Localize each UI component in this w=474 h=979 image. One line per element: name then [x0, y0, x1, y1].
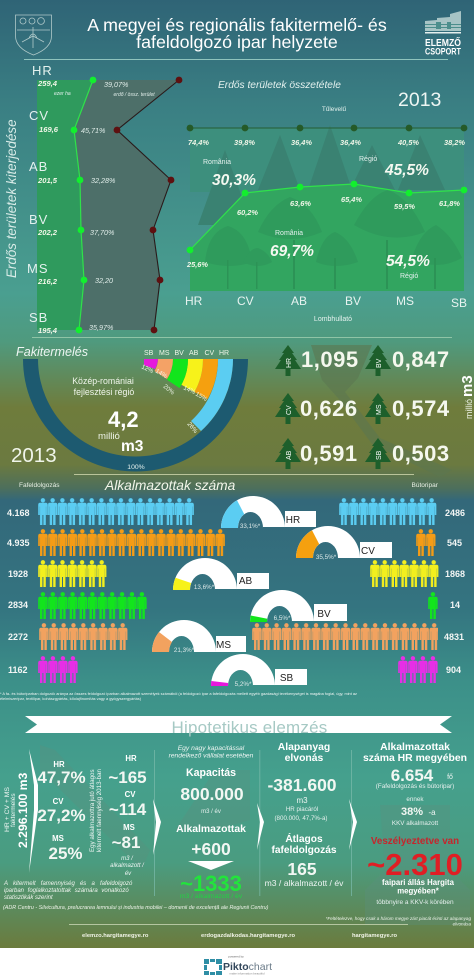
gauge: BV: BV [317, 609, 331, 620]
label: deciduous: Lombhullató [314, 316, 352, 323]
chart: forest area by county: 39,07% [104, 80, 129, 89]
gauge: AB: AB [239, 576, 252, 587]
column: raw material withdrawal: m3 / alkalmazott / év [265, 878, 344, 888]
chart: forest composition: 40,5% [397, 138, 419, 147]
chart: forest composition: 61,8% [439, 199, 460, 208]
chart: wood production semi-donut: 14% [182, 384, 197, 396]
text: central development region: Közép-romániai [72, 376, 134, 386]
pictogram row: BV: 2834 [8, 600, 28, 610]
logo: Elemző Csoport [425, 11, 462, 56]
per-employee values: MS [123, 823, 135, 832]
chart: wood production semi-donut: SB [144, 350, 154, 357]
rotated caption: Egy alkalmazottra jutó átlagos [89, 769, 96, 852]
column: large company capacity: Egy nagy kapacitással [178, 745, 245, 752]
chart: forest area by county: SB [29, 310, 48, 325]
chart: wood production semi-donut: HR [219, 350, 229, 357]
gauge: HR [221, 496, 316, 530]
column: employees in Harghita: fő [447, 774, 453, 781]
column headers: Fafeldolgozás [19, 482, 60, 489]
pictogram row: MS: 4831 [444, 632, 464, 642]
chart: forest area by county: ezer ha [54, 91, 71, 97]
banner: hypothetical analysis [25, 716, 452, 737]
pictogram row: HR [7, 498, 465, 525]
county production figures: 0,847 [392, 347, 450, 372]
value: 4.2 million m3: m3 [121, 438, 144, 455]
pictogram row: CV: 4.935 [7, 538, 30, 548]
chart: forest area by county: BV [29, 212, 48, 227]
county production figures: SB [376, 450, 383, 460]
chart: forest composition: Régió [359, 156, 377, 163]
pictogram row: MS [8, 623, 464, 650]
county production figures: AB [286, 450, 293, 460]
chart: forest composition [185, 125, 467, 310]
chart: wood production semi-donut: MS [159, 350, 170, 357]
column: employees in Harghita: 6.654 [391, 766, 434, 785]
arrow chevrons [153, 799, 357, 855]
chart: forest composition: BV [345, 294, 361, 308]
per-employee values: alkalmazott / [110, 863, 145, 869]
chart: forest area by county: 216,2 [37, 277, 58, 286]
vertical dividers [154, 750, 352, 896]
chart: forest composition: 65,4% [341, 195, 362, 204]
chart: wood production semi-donut: BV [174, 350, 184, 357]
shares by county: HR [53, 760, 65, 769]
asterisk note [326, 916, 471, 926]
chart: wood production semi-donut: 20% [162, 383, 176, 397]
per-employee values: m3 / [121, 856, 134, 862]
pictogram row: SB: 1162 [8, 665, 28, 675]
heading: forest composition: Erdős területek összetétele [218, 80, 341, 91]
chart: forest area by county: 45,71% [81, 126, 106, 135]
column: raw material withdrawal: (800.000, 47,7%-a) [275, 815, 327, 822]
rotated total: HR + CV + MS [4, 787, 11, 832]
shares by county: 27,2% [37, 806, 86, 825]
pictogram row: MS: 2272 [8, 632, 28, 642]
footnote: élelmiszeripar, textilipar, kohászgyártás, kőolajfinomítás vagy a gyógyszergyártás) [0, 696, 142, 701]
column: raw material withdrawal: elvonás [285, 753, 324, 764]
icon: county coat of arms [16, 15, 52, 55]
column: employees in Harghita: KKV alkalmazott [392, 820, 438, 827]
chart: forest area by county [27, 63, 182, 335]
chart: forest composition: 36,4% [340, 138, 361, 147]
chart: wood production semi-donut: CV [204, 350, 215, 357]
chart: forest composition: 59,5% [394, 202, 415, 211]
divider [24, 59, 448, 60]
chart: forest composition: 63,6% [290, 199, 311, 208]
chart: forest composition: 54,5% [386, 253, 430, 270]
text: central development region [72, 376, 134, 397]
chart: forest area by county: 35,97% [89, 323, 114, 332]
column: employees in Harghita: többnyire a KKV-k körében [376, 899, 454, 906]
asterisk note: *Feltételezve, hogy csak a három megye zárt piacát érinti az alapanyag [326, 916, 471, 921]
Piktochart logo: powered by [228, 954, 244, 958]
chart: wood production semi-donut: AB [189, 350, 199, 357]
website links [82, 933, 398, 939]
website links: elemzo.hargitamegye.ro [82, 933, 149, 939]
chart: forest composition: 74,4% [188, 138, 209, 147]
chart: forest composition: MS [396, 294, 414, 308]
gauge: BV [250, 590, 347, 622]
column: large company capacity: +600 [191, 839, 231, 859]
chart: forest area by county: 195,4 [38, 326, 58, 335]
chart: forest composition: România [203, 159, 231, 166]
column: employees in Harghita: (Fafeldolgozás és bútoripar) [376, 783, 454, 790]
gauge: CV: CV [361, 546, 375, 557]
per-employee values [108, 754, 147, 877]
column: raw material withdrawal: 165 [287, 859, 317, 879]
year 2013: 2013 [11, 444, 57, 467]
shares by county [37, 760, 86, 863]
pictogram row: AB [8, 560, 465, 587]
column: employees in Harghita: száma HR megyében [363, 753, 467, 764]
gauge: HR: HR [286, 515, 300, 526]
chart: wood production semi-donut: 100% [127, 464, 145, 471]
gauge: MS: MS [216, 640, 231, 651]
column: employees in Harghita: faipari állás Hargita [382, 878, 455, 887]
Piktochart logo: Piktochart [223, 961, 272, 973]
gauge: HR: 33,1%* [240, 523, 261, 530]
gauge: SB [211, 654, 307, 688]
pictogram row: CV: 545 [447, 538, 462, 548]
chart: forest composition: 60,2% [237, 208, 258, 217]
chart: forest composition: SB [451, 296, 467, 310]
label: coniferous: Tűlevelű [322, 106, 347, 113]
column: large company capacity: Kapacitás [186, 767, 236, 779]
statistics note: statisztikák szerint [4, 895, 53, 901]
column: employees in Harghita: ennek [406, 796, 424, 803]
title: A megyei és regionális fakitermelő- és [87, 15, 387, 35]
shares by county: MS [52, 834, 64, 843]
per-employee values: év [125, 871, 132, 877]
county production figures: 0,574 [392, 396, 450, 421]
pictogram row: HR: 4.168 [7, 508, 30, 518]
logo: Elemző Csoport: CSOPORT [425, 46, 462, 56]
gauge: CV [296, 526, 392, 561]
county production figures: 0,591 [300, 441, 358, 466]
shares by county: 25% [48, 844, 83, 863]
column: large company capacity [169, 745, 254, 900]
chart: forest area by county: 32,20 [95, 276, 113, 285]
column: raw material withdrawal [265, 742, 344, 888]
rotated total: faktermelés [10, 793, 17, 827]
per-employee values: CV [125, 790, 136, 799]
footnote [0, 691, 357, 701]
chart: forest area by county: 259,4 [37, 79, 58, 88]
gauge: SB: SB [280, 673, 293, 684]
per-employee values: ~114 [109, 800, 147, 819]
rotated total: 2.296.100 m3 [16, 773, 30, 848]
county production figures: 1,095 [301, 347, 359, 372]
column: raw material withdrawal: m3 [296, 796, 308, 805]
faint illustration behind numbers [311, 345, 452, 477]
gauge: BV: 6,5%* [274, 615, 291, 622]
column: employees in Harghita [363, 742, 467, 906]
Piktochart logo: make information beautiful [229, 972, 265, 976]
pictogram row: CV [7, 529, 462, 556]
chart: forest area by county: MS [27, 261, 48, 276]
chart: forest area by county: 201,5 [37, 176, 58, 185]
value: 4.2 million m3 [98, 407, 144, 455]
divider [32, 337, 452, 338]
footnote: * A fa- és bútoriparban dolgozók aránya az összes feldolgozó iparban alkalmazott személyek számából (a feldolgozó ipar a fafeldolgozás mellett egyéb gazdasági tevékenységet is magába foglal, úgy, mint az [0, 691, 357, 696]
value: 4.2 million m3: 4,2 [108, 407, 139, 432]
chart: forest area by county: AB [29, 159, 48, 174]
column headers [19, 482, 439, 489]
pictogram row: AB: 1928 [8, 569, 28, 579]
website links: erdogazdalkodas.hargitamegye.ro [201, 933, 296, 939]
chart: forest composition: 36,4% [291, 138, 312, 147]
column: large company capacity: 800.000 [180, 784, 244, 804]
chart: forest composition: 69,7% [270, 243, 314, 260]
chart: forest composition: 38,2% [444, 138, 465, 147]
chart: wood production semi-donut [23, 350, 248, 472]
column: employees in Harghita: 38% [401, 806, 423, 818]
Piktochart logo [204, 954, 272, 976]
column: employees in Harghita: megyében* [397, 886, 440, 896]
column: raw material withdrawal: Átlagos [285, 832, 323, 845]
rotated caption: kitermelt faennyiség 2013-ban [96, 769, 103, 852]
chart: forest area by county: erdő / össz. terület [114, 92, 155, 98]
chart: forest composition: HR [185, 294, 203, 308]
chart: forest composition: CV [237, 294, 254, 308]
shares by county: 47,7% [37, 768, 86, 787]
value: 4.2 million m3: millió [98, 431, 120, 442]
chart: wood production semi-donut: 15% [194, 391, 209, 403]
pictogram row: HR: 2486 [445, 508, 465, 518]
pictogram row: BV [8, 592, 460, 619]
per-employee values: HR [125, 754, 137, 763]
column: employees in Harghita: Alkalmazottak [380, 742, 450, 753]
column: large company capacity: rendelkező vállalat esetében [169, 752, 254, 760]
faint illustration behind analysis [40, 745, 470, 925]
shares by county: CV [53, 797, 64, 806]
gauge: MS [152, 620, 246, 654]
chart: forest area by county: 169,6 [39, 125, 59, 134]
column: raw material withdrawal: -381.600 [267, 775, 337, 795]
column: raw material withdrawal: Alapanyag [278, 742, 330, 753]
gauge: AB [173, 558, 269, 591]
gauge: CV: 35,5%* [316, 554, 337, 561]
divider [74, 474, 414, 475]
chart: forest composition: 39,8% [234, 138, 255, 147]
chart: forest composition: 25,6% [186, 260, 208, 269]
column: employees in Harghita: ~2.310 [367, 847, 463, 882]
chart: forest composition: România [275, 230, 303, 237]
website links: hargitamegye.ro [352, 933, 398, 939]
logo: Elemző Csoport: ELEMZŐ [425, 36, 461, 49]
heading: number of employees: Alkalmazottak száma [104, 478, 236, 493]
text: central development region: fejlesztési régió [74, 387, 134, 397]
county production figures: BV [376, 358, 383, 368]
column: raw material withdrawal: HR piacáról [286, 806, 318, 813]
gauge: AB: 13,6%* [194, 584, 215, 591]
statistics note: iparban foglalkoztatottak számára vonatkozó [4, 888, 129, 894]
rotated total [4, 773, 30, 848]
statistics note [3, 881, 133, 901]
county production figures: MS [376, 404, 383, 415]
banner: hypothetical analysis: Hipotetikus elemzés [172, 718, 327, 737]
column: large company capacity: m3 / alkalmazott / év [180, 893, 243, 900]
unit: million m3 [459, 375, 474, 419]
per-employee values: ~165 [108, 768, 147, 787]
unit: million m3: millió [464, 399, 474, 419]
rotated caption [89, 769, 103, 852]
heading: Fakitermelés: Fakitermelés [16, 345, 89, 359]
county production figures: 0,626 [300, 396, 358, 421]
county production figures: 0,503 [392, 441, 450, 466]
chart: forest area by county: CV [29, 108, 49, 123]
chart: forest area by county: HR [32, 63, 53, 78]
source note: (ADR Centru - Silvicultura, prelucrarea lemnului și industria mobilei – domenii de excelență ale Regiunii Centru) [3, 905, 269, 911]
chart: forest composition: Régió [400, 273, 418, 280]
column: raw material withdrawal: fafeldolgozás [271, 845, 337, 856]
county production figures: CV [286, 405, 293, 415]
column headers: Bútoripar [412, 482, 439, 489]
chart: forest composition: AB [291, 294, 307, 308]
chart: wood production semi-donut: 14% [154, 368, 169, 380]
county production figures [275, 345, 450, 469]
year 2013: 2013 [398, 89, 441, 111]
chart: wood production semi-donut: 12% [140, 363, 155, 375]
divider [69, 924, 408, 925]
asterisk note: elvonása [453, 922, 471, 926]
county production figures: HR [286, 358, 293, 368]
arrow chevron [29, 749, 38, 873]
column: employees in Harghita: Veszélyeztetve van [371, 836, 459, 847]
column: employees in Harghita: -a [428, 808, 436, 817]
vertical axis title: Erdős területek kiterjedése [4, 119, 19, 278]
column: large company capacity: m3 / év [201, 809, 221, 815]
pictogram row: SB: 904 [446, 665, 461, 675]
chart: forest area by county: 32,28% [91, 176, 116, 185]
chart: forest composition: 30,3% [212, 172, 256, 189]
statistics note: A kitermelt famennyiség és a fafeldolgozó [3, 881, 133, 887]
column: large company capacity: Alkalmazottak [176, 824, 246, 835]
per-employee values: ~81 [112, 833, 140, 852]
column: large company capacity: ~1333 [180, 871, 242, 896]
chart: forest composition: 45,5% [384, 162, 429, 179]
pictogram row: BV: 14 [450, 600, 460, 610]
title [87, 15, 387, 52]
gauge: SB: 5,2%* [235, 681, 252, 688]
title: fafeldolgozó ipar helyzete [136, 32, 338, 52]
chart: forest area by county: 202,2 [37, 228, 58, 237]
pictogram row: AB: 1868 [445, 569, 465, 579]
pictogram row: SB [8, 656, 461, 683]
chart: wood production semi-donut: 26% [185, 421, 199, 435]
chart: forest area by county: 37,70% [90, 228, 115, 237]
gauge: MS: 21,3%* [174, 647, 195, 654]
